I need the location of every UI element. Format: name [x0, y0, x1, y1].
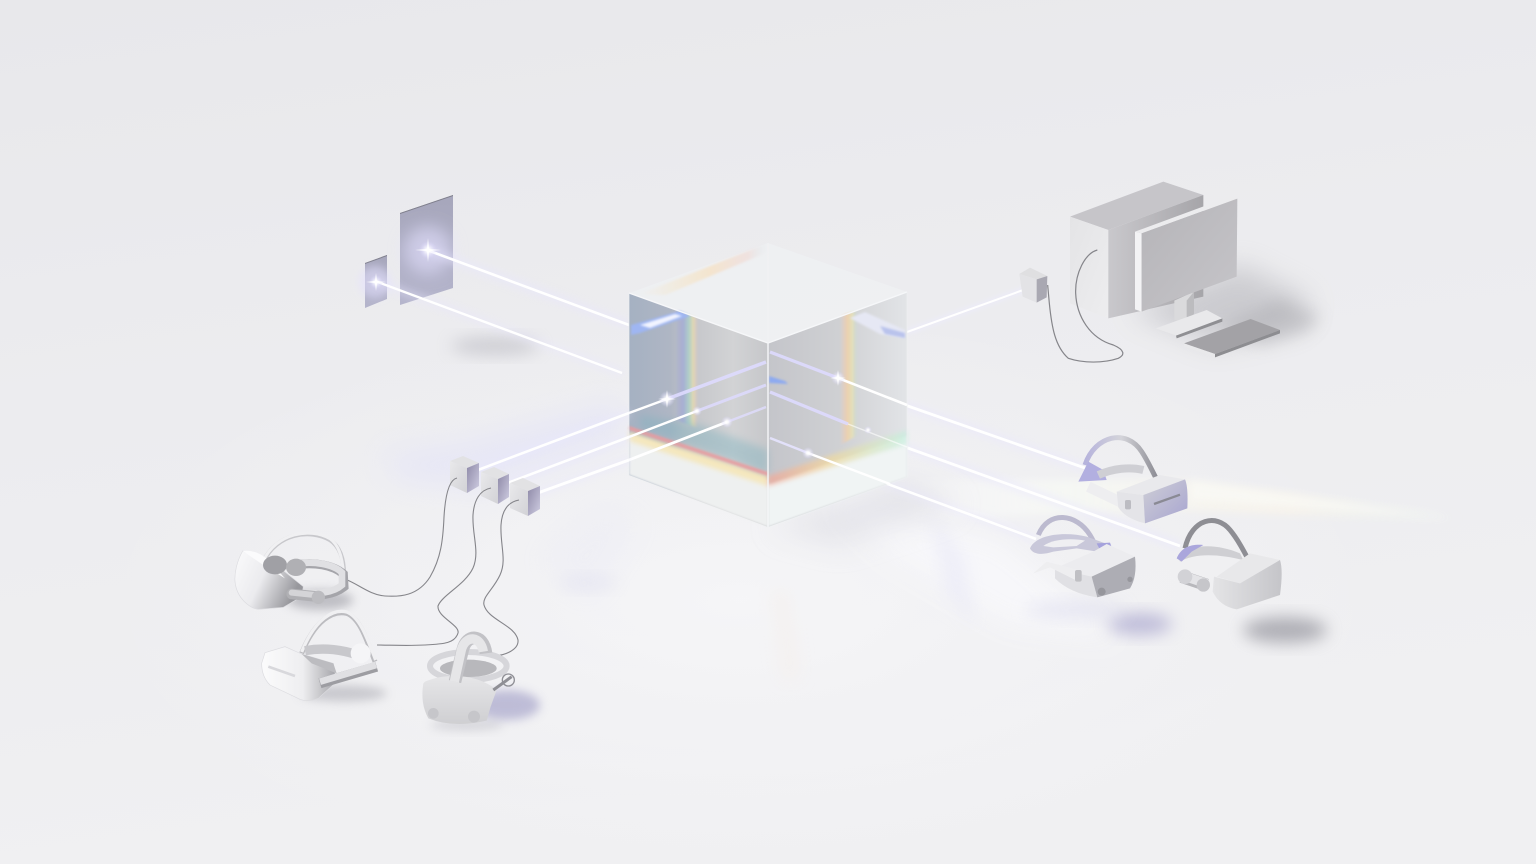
- cube left yellow band: [629, 431, 768, 486]
- headset B: [1030, 517, 1136, 597]
- shadow: headset right B: [1243, 617, 1327, 643]
- monitor stand: [1156, 292, 1222, 338]
- headset 3: [422, 638, 514, 724]
- headset group: left on the floor: [235, 533, 540, 730]
- cube top iridescent edge: [640, 243, 768, 295]
- panel: large source screen: [400, 195, 453, 305]
- cube left red band: [629, 426, 768, 476]
- cube right rainbow column: [840, 310, 858, 445]
- cube centre blue glint: [769, 376, 788, 384]
- computer: tower, monitor and keyboard: [1019, 182, 1280, 362]
- cube left rainbow column: [675, 310, 698, 428]
- module 1: [450, 456, 479, 493]
- sparkle: large screen: [415, 238, 441, 262]
- beam: large screen to cube: [427, 250, 629, 325]
- cube right face: [768, 292, 907, 527]
- beam: computer module to cube: [907, 289, 1026, 332]
- cable from module to tower: [1048, 250, 1123, 362]
- shadow: cube: [770, 480, 960, 545]
- headset C: [1177, 521, 1282, 609]
- shadow: [287, 590, 353, 610]
- headset 2: [262, 611, 377, 701]
- cable 3: [484, 500, 519, 656]
- cube left face: [629, 293, 768, 527]
- module 2: [481, 467, 509, 504]
- monitor screen: [1135, 197, 1237, 312]
- shadow: panels: [451, 337, 539, 355]
- cube left bottom teal glow: [640, 415, 768, 474]
- headset A: [1078, 438, 1188, 523]
- headset group: floating on the right: [1030, 438, 1282, 609]
- cube left floor zone: [629, 434, 768, 527]
- modules: three light receivers with cables: [347, 456, 540, 656]
- cube top face: [629, 243, 907, 343]
- shadow: left modules: [558, 576, 618, 590]
- shadow: far ghost: [1025, 601, 1125, 619]
- cube blue flare left: [631, 311, 690, 335]
- shadow: computer on the floor: [1130, 265, 1320, 345]
- headset 1: [235, 533, 344, 609]
- cube edges: [629, 292, 907, 527]
- light glow: refracted lavender and rainbow caustics on the floor: [380, 400, 1460, 680]
- panel: small source screen: [359, 255, 391, 308]
- beams: right side exiting cube to floating headsets: [885, 405, 1180, 546]
- beam: small screen to cube: [375, 281, 622, 373]
- keyboard: [1184, 319, 1280, 357]
- shadow: headset right A: [1108, 613, 1172, 635]
- module: [1019, 268, 1047, 303]
- sparkle: small screen: [366, 273, 386, 291]
- module 3: [510, 478, 540, 516]
- prism cube: [629, 243, 907, 527]
- cube flare right: [850, 312, 905, 338]
- beams: left modules to cube: [470, 413, 629, 494]
- cable 1: [347, 478, 457, 596]
- cube right rainbow band: [768, 430, 907, 486]
- sparkles in cube: [658, 370, 872, 459]
- cube right floor zone: [768, 436, 907, 527]
- tower: [1070, 182, 1203, 318]
- inner beams right face: [770, 352, 907, 484]
- inner beams left face: [629, 362, 766, 460]
- cable 2: [377, 488, 491, 645]
